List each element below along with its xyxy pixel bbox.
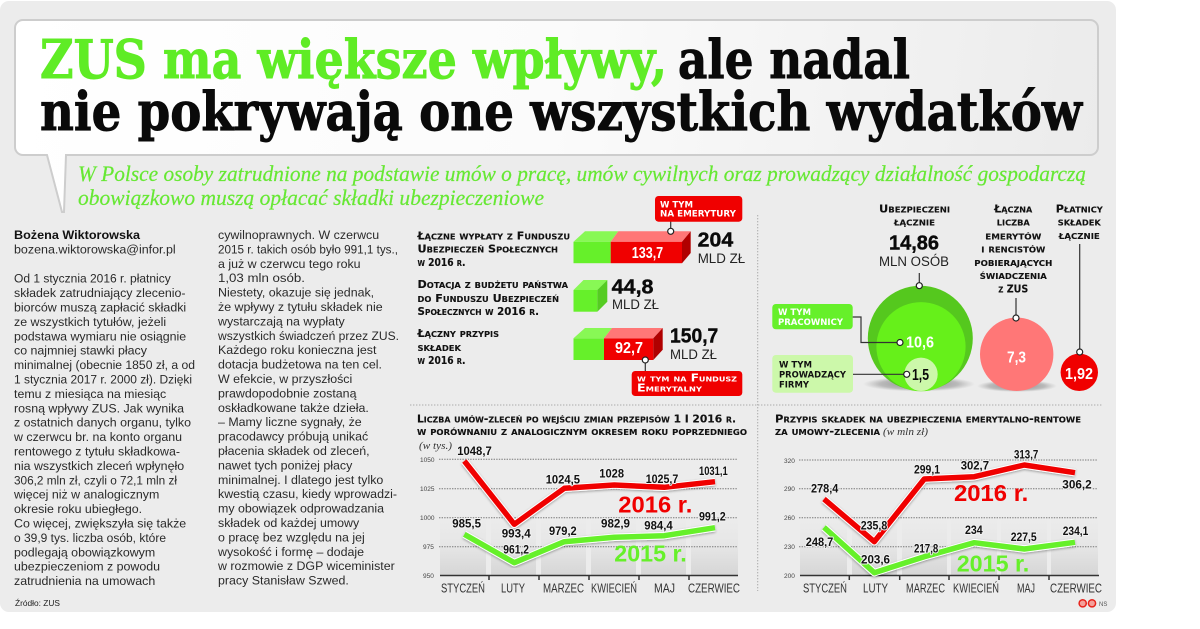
article column 1: minimalnej (obecnie 1850 zł, a od [14, 358, 195, 372]
article column 2: wysokość i formę – dodaje [217, 545, 364, 559]
heading: insured total: łącznie [893, 216, 935, 229]
value: 7,3: 7,3 [1007, 350, 1026, 367]
icon: copyright marks and author initials: NS [1099, 602, 1107, 608]
title: nie pokrywają one wszystkich wydatków [40, 81, 1083, 143]
month labels: CZERWIEC [1050, 581, 1102, 595]
data values 2015: 979,2 [549, 524, 577, 538]
callout: pensions: NA EMERYTURY [660, 210, 737, 220]
data values 2016: 313,7 [1014, 447, 1039, 461]
article column 2: oskładkowane także dzieła. [218, 401, 369, 415]
data values 2016: 235,8 [861, 518, 888, 532]
article column 2: 1,03 mln osób. [218, 271, 305, 285]
heading: pensioners: i rencistów [981, 243, 1045, 256]
callout: employees: PRACOWNICY [778, 318, 844, 328]
heading: pensioners: z ZUS [998, 283, 1028, 296]
article column 2: my obowiązek odprowadzania [218, 502, 384, 516]
chart title [417, 413, 747, 452]
heading: pensioners: pobierających [974, 256, 1052, 269]
y axis labels: 290 [784, 486, 795, 493]
pin [1013, 298, 1019, 321]
x axis [440, 575, 738, 580]
heading: insured total: 14,86 [889, 231, 939, 254]
y axis labels: 1025 [420, 486, 435, 493]
month labels: STYCZEŃ [441, 581, 485, 596]
chart title: (w tys.) [419, 441, 453, 452]
article column 1: rentowego z tytułu składkowa- [14, 444, 180, 458]
label: total payouts: Ubezpieczeń Społecznych [418, 243, 558, 256]
article column 1: więcej niż w analogicznym [13, 488, 159, 502]
article column 2: – Mamy liczne sygnały, że [218, 415, 362, 429]
section dividers [410, 215, 1102, 591]
data values 2015: 985,5 [452, 517, 481, 531]
value: 44,8 mld zł [612, 275, 659, 312]
pin [1077, 244, 1083, 355]
series label 2015: 2015 r. [614, 541, 687, 567]
article column 1: podstawa wymiaru nie osiągnie [14, 329, 186, 343]
circle: 7,3 [980, 318, 1053, 391]
article column 2: o pracę bez względu na jej [218, 530, 365, 544]
article column 1: ze wszystkich tytułów, jeżeli [14, 315, 166, 329]
data values 2015: 984,4 [644, 518, 673, 532]
chart title: Liczba umów-zleceń po wejściu zmian przepisów 1 I 2016 r. [417, 413, 736, 426]
label: contributions: składek [418, 341, 462, 354]
heading: insured total: MLN OSÓB [879, 254, 949, 269]
value: 150,7 mld zł: MLD ZŁ [670, 347, 717, 362]
3D bar: contributions: 92,7 [615, 340, 643, 357]
line 2016 [824, 465, 1075, 542]
top pin [916, 273, 922, 289]
data values 2015: 234 [965, 523, 983, 537]
data values 2015: 248,7 [806, 535, 834, 549]
month labels: MARZEC [543, 582, 584, 596]
label: subsidy: Społecznych w 2016 r. [418, 305, 539, 318]
month labels [803, 580, 1102, 595]
series label 2016: 2016 r. [618, 492, 692, 518]
label: total payouts: Łączne wypłaty z Funduszu [416, 230, 570, 242]
month labels: MAJ [654, 582, 675, 596]
data values 2016: 1031,1 [699, 464, 728, 478]
data values 2016 [457, 444, 728, 541]
article column 1: bozena.wiktorowska@infor.pl [14, 242, 176, 256]
y axis labels: 1000 [420, 515, 435, 522]
article column 1: w czerwcu br. na konto organu [13, 430, 182, 444]
data values 2016: 278,4 [811, 481, 839, 495]
y axis labels: 320 [784, 458, 795, 465]
month labels: KWIECIEŃ [953, 580, 999, 595]
article column 2: kwestią czasu, kiedy wprowadzi- [218, 487, 397, 501]
article column 2: płacenia składek od zleceń, [218, 444, 370, 458]
row: total payouts [416, 196, 746, 269]
article column 1: rosną wpływy ZUS. Jak wynika [14, 401, 184, 415]
callout: pension fund: Emerytalny [637, 383, 703, 395]
chart title: za umowy-zlecenia [775, 425, 881, 438]
data values 2016: 1024,5 [546, 472, 580, 486]
article column 2: Każdego roku konieczna jest [218, 343, 377, 357]
article column 1: ubezpieczeniom z powodu [14, 560, 160, 574]
row: total contributions [416, 325, 742, 396]
value: 150,7 mld zł: 150,7 [670, 325, 718, 348]
month labels: LUTY [863, 581, 889, 595]
chart title: Przypis składek na ubezpieczenia emerytalno-rentowe [775, 413, 1081, 426]
bubble: pensioners [974, 203, 1057, 392]
article column 1: o 39,9 tys. liczba osób, które [14, 531, 166, 545]
article column 1: zatrudnienia na umowach [14, 574, 155, 588]
article column 2: Niestety, okazuje się jednak, [218, 286, 374, 300]
3D bar: total payouts: 133,7 [632, 245, 663, 262]
3D bar: total payouts [574, 231, 691, 263]
heading: pensioners [974, 203, 1052, 296]
heading: payers: Płatnicy [1056, 203, 1103, 216]
callout: business owners: FIRMY [779, 381, 810, 391]
article column 2: pracodawcy próbują unikać [218, 430, 368, 444]
heading: pensioners: liczba [997, 216, 1031, 229]
callout: employees: 10,6 [906, 334, 934, 351]
article column 1: nia wszystkich zleceń wpłynęło [14, 459, 184, 473]
chart title: (w mln zł) [883, 427, 929, 438]
line 2015 [464, 528, 715, 563]
article column 1: co najmniej stawki płacy [14, 344, 148, 358]
month labels: KWIECIEŃ [591, 581, 637, 596]
callout: business owners: 1,5 [912, 367, 929, 384]
label: contributions [416, 327, 499, 367]
circle: employees [876, 302, 966, 391]
title: ZUS ma większe wpływy, [40, 29, 667, 91]
article column 2: minimalnej. I dlatego jest tylko [218, 473, 383, 487]
heading: insured total: Ubezpieczeni [879, 203, 950, 216]
label: contributions: Łączny przypis [416, 327, 499, 340]
callout: employees [772, 304, 934, 351]
bubbles: insured people [772, 203, 975, 393]
data values 2016: 993,4 [502, 527, 531, 541]
line chart: contributions on contracts [775, 413, 1102, 595]
article column 2: że wpływy z tytułu składek nie [218, 300, 383, 314]
heading: pensioners: świadczenia [980, 269, 1048, 282]
callout: business owners: PROWADZĄCY [779, 371, 847, 381]
3D bar: subsidy [574, 280, 607, 312]
heading: payers: składek [1058, 216, 1102, 229]
callout: pensions [655, 196, 742, 234]
article column 2: wszystkich świadczeń przez ZUS. [217, 329, 399, 343]
article column 1: biorców muszą zapłacić składki [14, 300, 186, 314]
column backgrounds [800, 517, 1098, 575]
callout: pension fund [632, 357, 742, 396]
data values 2015: 982,9 [601, 516, 630, 530]
data values 2016: 306,2 [1062, 477, 1092, 491]
bubble: contribution payers [1056, 203, 1103, 391]
source: Źródło: ZUS [15, 598, 60, 608]
callout: pensions: W TYM [660, 200, 693, 210]
data values 2016: 1028 [599, 467, 624, 481]
circle: 1,92 [1061, 354, 1098, 391]
heading: payers [1056, 203, 1103, 242]
heading: insured total [879, 203, 950, 269]
speech bubble [15, 20, 1098, 212]
data values 2016: 302,7 [961, 458, 989, 472]
data values 2015 [806, 523, 1089, 566]
article column 2 [217, 228, 399, 588]
label: total payouts [416, 230, 570, 269]
label: subsidy: Dotacja z budżetu państwa [418, 278, 569, 291]
data values 2015 [452, 510, 726, 556]
article column 2: składek od każdej umowy [218, 516, 360, 530]
grid lines [799, 460, 1098, 547]
circle: insured 14,86 [868, 286, 973, 391]
value: 204 mld zł: 204 [698, 229, 734, 252]
chart title [775, 413, 1081, 438]
article column 1: Bożena Wiktorowska [14, 228, 140, 242]
column backgrounds [440, 517, 738, 575]
data values 2015: 234,1 [1063, 524, 1089, 538]
value: 1,92: 1,92 [1065, 366, 1093, 383]
article column 1: 306,2 mln zł, czyli o 72,1 mln zł [14, 473, 177, 487]
value: 204 mld zł [698, 229, 746, 266]
circle shadow [977, 380, 1057, 392]
y axis labels [420, 457, 435, 580]
label: total payouts: w 2016 r. [418, 256, 466, 269]
article column 2: dotacja budżetowa na ten cel. [218, 358, 382, 372]
month labels: MARZEC [906, 581, 945, 595]
data values 2015: 217,8 [914, 542, 939, 556]
article column 1 [13, 228, 195, 588]
article column 2: w rozmowie z DGP wiceminister [217, 559, 395, 573]
article column 1: temu z miesiąca na miesiąc [14, 387, 166, 401]
article column 2: prawdopodobnie zostaną [218, 386, 357, 400]
heading: pensioners: emerytów [985, 229, 1041, 242]
3D bar: contributions [574, 328, 663, 360]
month labels: LUTY [501, 582, 525, 596]
data values 2016 [811, 447, 1092, 532]
subtitle [78, 161, 1086, 210]
callout: business owners: W TYM [779, 360, 812, 370]
value: 150,7 mld zł [670, 325, 718, 362]
title: ale nadal [678, 29, 910, 91]
y axis labels [784, 458, 795, 580]
month labels [441, 581, 740, 596]
series label 2015: 2015 r. [957, 551, 1029, 577]
circle shadow [863, 376, 975, 392]
label: subsidy [418, 278, 569, 318]
value: 44,8 mld zł: MLD ZŁ [612, 297, 659, 312]
article column 1: składek zatrudniający zlecenio- [14, 286, 186, 300]
value: 44,8 mld zł: 44,8 [612, 275, 654, 298]
data values 2016: 1048,7 [457, 444, 492, 458]
label: contributions: w 2016 r. [418, 354, 466, 367]
line 2016 [464, 461, 715, 524]
article column 2: a już w czerwcu tego roku [218, 257, 361, 271]
data values 2015: 991,2 [699, 510, 726, 524]
article column 2: pracy Stanisław Szwed. [218, 574, 349, 588]
y axis labels: 260 [784, 515, 795, 522]
callout: employees: W TYM [778, 308, 811, 318]
article column 2: wystarczają na wypłaty [217, 314, 346, 328]
article column 2: cywilnoprawnych. W czerwcu [218, 228, 379, 242]
data values 2015: 203,6 [861, 552, 890, 566]
subtitle: W Polsce osoby zatrudnione na podstawie umów o pracę, umów cywilnych oraz prowadzący działalność gospodarczą [78, 161, 1086, 186]
article column 2: W efekcie, w przyszłości [218, 372, 352, 386]
row: state budget subsidy [418, 275, 659, 318]
article column 1: podlegają obowiązkowym [14, 545, 155, 559]
line 2015 [824, 527, 1075, 573]
article column 1: 1 stycznia 2017 r. 2000 zł). Dzięki [14, 372, 192, 386]
article column 1: Co więcej, zwiększyła się także [14, 516, 186, 530]
article column 1: z ostatnich danych organu, tylko [14, 416, 191, 430]
title [40, 29, 1083, 143]
chart title: w porównaniu z analogicznym okresem roku poprzedniego [417, 425, 747, 438]
data values 2015: 227,5 [1011, 530, 1037, 544]
line chart: number of contracts [417, 413, 747, 596]
month labels: MAJ [1017, 581, 1035, 595]
x axis [800, 575, 1099, 580]
grid lines [439, 459, 738, 547]
y axis labels: 230 [784, 544, 795, 551]
article column 1: Od 1 stycznia 2016 r. płatnicy [14, 272, 171, 286]
y axis labels: 950 [423, 573, 434, 580]
data values 2016: 299,1 [914, 462, 940, 476]
value: 204 mld zł: MLD ZŁ [698, 251, 746, 266]
y axis labels: 975 [423, 544, 434, 551]
label: subsidy: do Funduszu Ubezpieczeń [418, 292, 559, 305]
data values 2015: 961,2 [503, 542, 529, 556]
month labels: STYCZEŃ [803, 580, 847, 595]
article column 2: 2015 r. takich osób było 991,1 tys., [218, 242, 398, 256]
callout: business owners [772, 355, 929, 393]
heading: pensioners: Łączna [993, 203, 1033, 216]
y axis labels: 1050 [420, 457, 435, 464]
subtitle: obowiązkowo muszą opłacać składki ubezpieczeniowe [78, 185, 544, 210]
data values 2016: 1025,7 [646, 472, 679, 486]
series label 2016: 2016 r. [954, 480, 1028, 506]
icon: copyright marks and author initials [1079, 600, 1107, 608]
y axis labels: 200 [784, 573, 795, 580]
article column 1: okresie roku ubiegłego. [14, 502, 142, 516]
month labels: CZERWIEC [688, 582, 740, 596]
callout: pension fund: w tym na Fundusz [637, 373, 737, 385]
article column 2: nawet tych poniżej płacy [218, 458, 353, 472]
circle: business owners [904, 358, 938, 391]
heading: payers: łącznie [1058, 229, 1100, 242]
